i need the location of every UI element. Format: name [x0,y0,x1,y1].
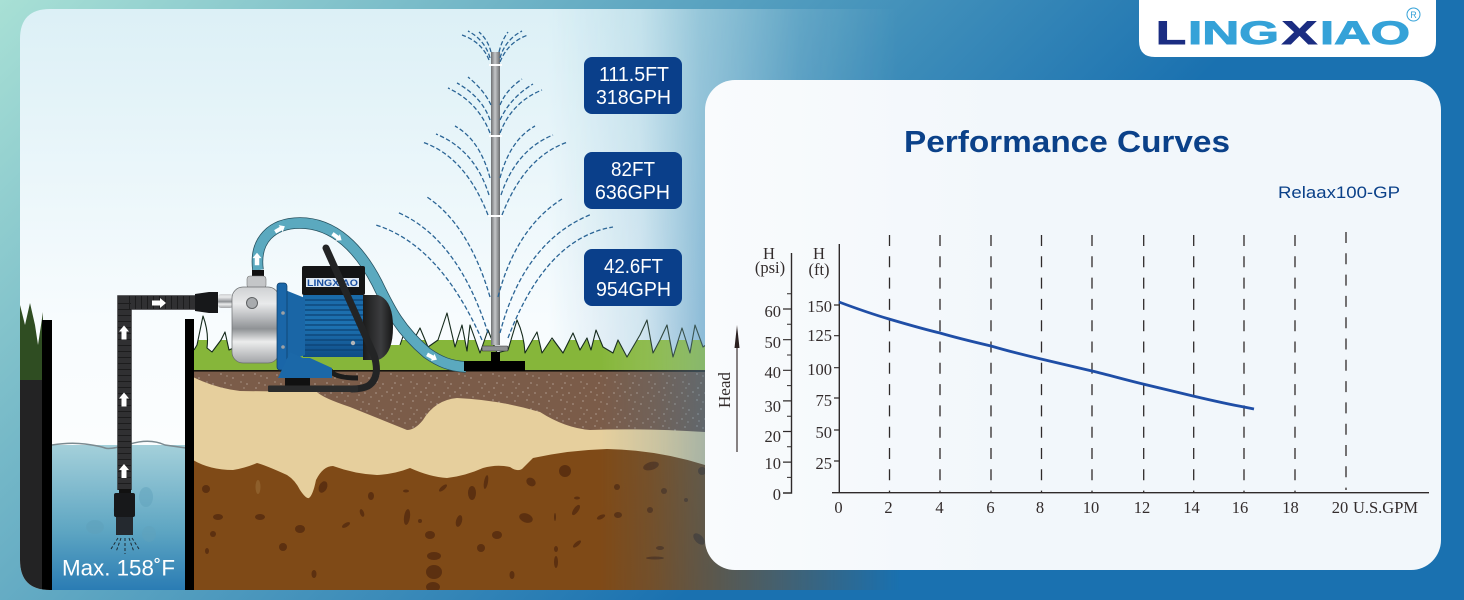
performance chart [715,232,1429,517]
psi scale labels: 50 [764,333,781,352]
ground layer: soil [193,449,900,590]
motor shoulder [287,290,305,358]
flow arrows in pipe [119,298,166,478]
logo card: R [1410,10,1417,20]
psi scale labels: 10 [764,454,781,473]
feet scale labels: 100 [807,360,832,379]
sky [20,9,900,590]
model label: Relaax100-GP [1278,183,1400,202]
axis titles: H [813,244,825,263]
psi scale labels: 60 [764,302,781,321]
psi scale labels [764,302,781,504]
flow scale labels: 18 [1282,498,1299,517]
flow scale labels: 8 [1036,498,1044,517]
logo card: L [1156,15,1186,51]
left bank with dark grass [20,303,44,590]
flow scale labels: 0 [834,498,843,517]
chart heading: Performance Curves [904,125,1230,159]
badge: 82FT 636GPH [584,152,682,209]
axis titles: (psi) [755,258,785,277]
flow scale labels: 20 [1332,498,1348,517]
vertical dashed gridlines [890,232,1346,492]
head arrow [734,325,740,452]
pump nameplate label: LINGXIAO [307,278,358,288]
logo card: IAO [1320,15,1410,51]
psi scale labels: 0 [773,485,781,504]
axis titles: H [763,244,775,263]
panel: pump installation scene [20,9,900,592]
temperature label: Max. 158˚F [62,556,175,580]
terminal box [302,266,365,295]
well walls [42,319,194,590]
badge: 42.6FT 954GPH: 42.6FT [604,256,663,278]
spray at foot valve [111,538,139,554]
psi scale labels: 20 [764,427,781,446]
carry handle [326,248,376,389]
pump flange [277,283,287,370]
ground layer: pebbles [194,370,705,432]
soil stones [202,460,707,592]
feet scale labels: 150 [807,297,832,316]
axes [783,244,1429,493]
sprinkler standpipe [464,52,525,371]
well water [52,441,186,590]
feet scale labels: 75 [816,391,832,410]
badge: 42.6FT 954GPH: 954GPH [596,279,671,301]
badge: 111.5FT 318GPH [584,57,682,114]
axis titles: (ft) [808,260,830,279]
logo card: ING [1188,15,1279,51]
grass strip [194,312,705,370]
flow scale labels: 10 [1083,498,1099,517]
psi scale labels: 30 [764,397,781,416]
flow scale labels: 6 [986,498,995,517]
flow scale labels: U.S.GPM [1353,498,1418,517]
pump base [278,356,332,378]
feet scale labels: 25 [816,454,832,473]
badge: 111.5FT 318GPH: 318GPH [596,87,671,109]
pump foot [268,386,358,392]
psi scale labels: 40 [764,363,781,382]
feet scale labels [807,297,832,473]
discharge hose [252,223,466,367]
pump volute [232,287,279,363]
flow scale labels: 14 [1183,498,1200,517]
axis titles: Head [715,372,734,408]
pump outlet neck [247,276,266,288]
axis titles [715,244,830,408]
logo card [1139,0,1436,57]
motor body [303,295,364,357]
pump inlet connector [195,292,218,313]
panel: performance curves [705,80,1441,570]
feet scale labels: 125 [807,326,832,345]
jet pump [195,248,393,392]
performance curve [839,302,1254,409]
badge: 82FT 636GPH: 82FT [611,159,655,181]
flow scale labels: 16 [1232,498,1248,517]
feet scale labels: 50 [816,423,832,442]
flow scale labels: 12 [1134,498,1150,517]
motor end cap [363,295,393,360]
flow scale labels: 4 [935,498,944,517]
flow scale labels: 2 [884,498,893,517]
logo card: X [1282,15,1318,51]
ground layer: sand [194,378,705,498]
badge: 42.6FT 954GPH [584,249,682,306]
pump handle back [330,370,358,378]
badge: 111.5FT 318GPH: 111.5FT [599,64,669,86]
badge: 82FT 636GPH: 636GPH [595,182,670,204]
suction pipe [114,302,195,535]
flow scale labels [834,498,1418,517]
water spray arcs [376,31,613,340]
